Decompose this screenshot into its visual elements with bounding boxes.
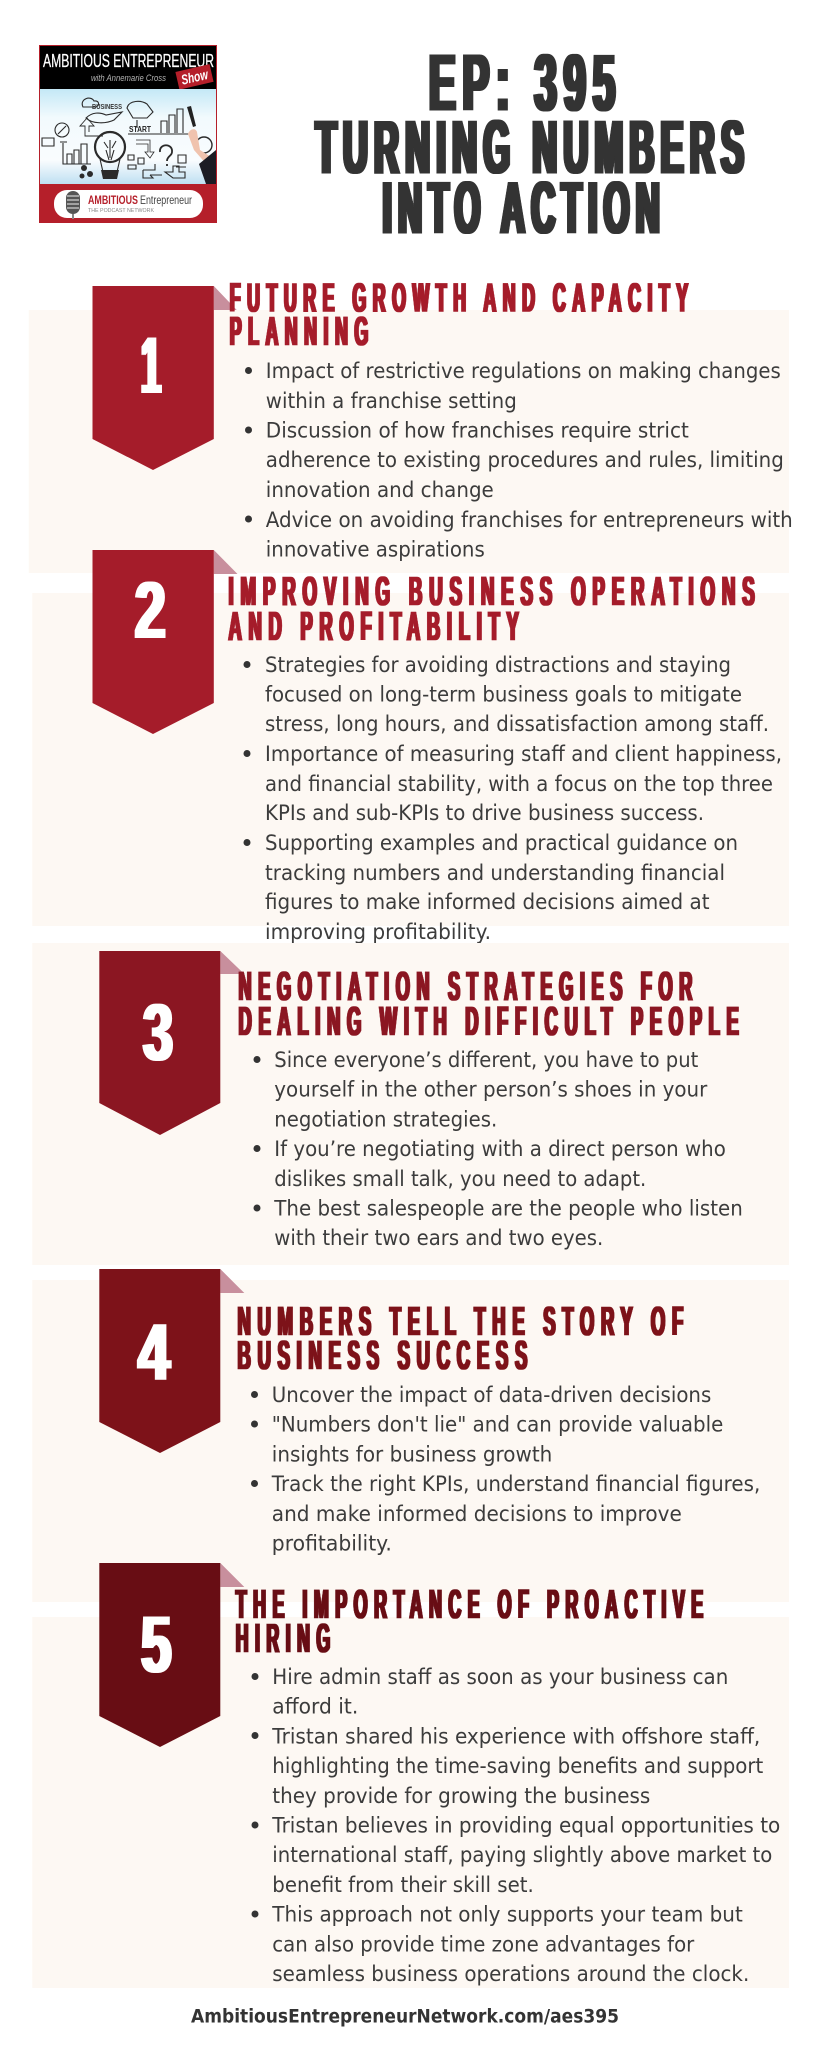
section 5: proactive hiring [32, 1563, 789, 1988]
bullet list 2: figures to make informed decisions aimed at [265, 890, 710, 915]
logo microphone [66, 191, 80, 219]
bullet list 1: Advice on avoiding franchises for entrepreneurs with [266, 508, 793, 533]
logo network pill [40, 184, 216, 222]
number badge 2 [92, 550, 214, 734]
ribbon fold 3 [220, 951, 244, 974]
bullet list 5: seamless business operations around the clock. [272, 1962, 749, 1987]
bullet list 2: focused on long-term business goals to mitigate [265, 682, 742, 708]
ribbon fold 1 [214, 286, 237, 310]
section 2: business operations [32, 550, 789, 945]
section 1: future growth [29, 274, 793, 573]
number badge 4 [99, 1269, 220, 1453]
bullet list 4 [251, 1383, 760, 1556]
panel background 3 [32, 943, 789, 1265]
ribbon fold 4 [220, 1269, 244, 1293]
logo network pill: AMBITIOUS [88, 193, 138, 207]
bullet list 3 [254, 1048, 743, 1251]
podcast cover logo [39, 45, 217, 223]
bullet list 1: Discussion of how franchises require strict [266, 418, 689, 444]
heading 3 [238, 963, 746, 1044]
bullet list 4: insights for business growth [272, 1442, 552, 1467]
bullet list 3: If you’re negotiating with a direct person who [274, 1137, 726, 1162]
number badge 3 [99, 951, 220, 1135]
heading 5 [236, 1581, 710, 1661]
logo sketch illustration: START [129, 125, 151, 134]
bullet list 4: Uncover the impact of data-driven decisions [272, 1383, 711, 1408]
bullet list 5: highlighting the time-saving benefits and support [272, 1754, 763, 1779]
logo show name: AMBITIOUS ENTREPRENEUR [43, 51, 214, 71]
number badge 5 [99, 1563, 220, 1747]
heading 2 [228, 568, 762, 649]
logo network pill: Entrepreneur [140, 193, 192, 207]
heading 1: PLANNING [230, 308, 375, 354]
number 3: 3 [143, 988, 173, 1078]
bullet list 3: yourself in the other person’s shoes in your [274, 1078, 707, 1103]
bullet list 5: they provide for growing the business [272, 1784, 650, 1809]
footer url: AmbitiousEntrepreneurNetwork.com/aes395 [191, 2007, 619, 2028]
bullet list 1: innovative aspirations [266, 538, 485, 562]
bullet list 4: profitability. [272, 1532, 392, 1556]
logo show tag: Show [180, 66, 210, 88]
main title [316, 38, 750, 249]
bullet list 2: tracking numbers and understanding financial [265, 861, 725, 886]
bullet list 5: Tristan shared his experience with offshore staff, [271, 1724, 760, 1749]
ribbon fold 2 [214, 550, 238, 574]
bullet list 2 [244, 653, 782, 945]
logo network pill: THE PODCAST NETWORK [88, 208, 154, 214]
panel background 4 [32, 1280, 789, 1602]
section 3: negotiation [32, 943, 789, 1265]
bullet list 5 [252, 1665, 780, 1987]
number 5: 5 [141, 1600, 172, 1690]
bullet list 1: Impact of restrictive regulations on making changes [266, 359, 781, 384]
bullet list 2: and financial stability, with a focus on the top three [265, 772, 773, 797]
bullet list 1: innovation and change [266, 478, 494, 503]
panel background 1 [29, 310, 789, 573]
logo host name: with Annemarie Cross [91, 73, 166, 83]
number 2: 2 [135, 566, 166, 656]
section 1: future growth: 1 [141, 321, 161, 411]
bullet list 3: dislikes small talk, you need to adapt. [274, 1167, 646, 1192]
panel background 2 [32, 593, 789, 926]
number badge 1 [92, 286, 214, 470]
heading 5: HIRING [236, 1615, 337, 1661]
bullet list 4: Track the right KPIs, understand financial figures, [271, 1472, 760, 1497]
bullet list 2: KPIs and sub-KPIs to drive business success. [265, 801, 704, 826]
bullet list 3: Since everyone’s different, you have to put [274, 1048, 698, 1073]
bullet list 1 [245, 359, 793, 562]
bullet list 2: improving profitability. [265, 920, 491, 945]
panel background 5 [32, 1617, 789, 1988]
bullet list 2: Supporting examples and practical guidance on [265, 831, 738, 856]
bullet list 2: Strategies for avoiding distractions and staying [265, 653, 731, 678]
heading 1 [230, 274, 695, 354]
bullet list 1: within a franchise setting [266, 389, 517, 414]
bullet list 3: with their two ears and two eyes. [274, 1226, 603, 1251]
logo sketch illustration [40, 89, 216, 184]
logo sketch illustration: BUSINESS [92, 104, 122, 111]
bullet list 2: stress, long hours, and dissatisfaction among staff. [265, 712, 769, 737]
bullet list 5: international staff, paying slightly above market to [272, 1843, 772, 1868]
number 4: 4 [138, 1308, 170, 1398]
bullet list 4: and make informed decisions to improve [272, 1502, 682, 1527]
bullet list 5: Hire admin staff as soon as your business can [272, 1665, 728, 1690]
bullet list 3: negotiation strategies. [274, 1107, 497, 1132]
bullet list 4: "Numbers don't lie" and can provide valuable [272, 1413, 723, 1438]
section 4: numbers tell the story [32, 1269, 789, 1602]
bullet list 5: Tristan believes in providing equal opportunities to [271, 1814, 780, 1838]
bullet list 2: Importance of measuring staff and client happiness, [265, 742, 782, 767]
bullet list 5: can also provide time zone advantages for [272, 1932, 694, 1957]
ribbon fold 5 [220, 1563, 244, 1587]
main title: EP: 395 [429, 38, 622, 127]
bullet list 3: The best salespeople are the people who listen [273, 1196, 743, 1222]
bullet list 5: afford it. [272, 1695, 358, 1720]
bullet list 5: benefit from their skill set. [272, 1873, 534, 1898]
bullet list 5: This approach not only supports your team but [271, 1903, 743, 1928]
heading 4 [238, 1298, 690, 1378]
bullet list 1: adherence to existing procedures and rules, limiting [266, 448, 784, 473]
